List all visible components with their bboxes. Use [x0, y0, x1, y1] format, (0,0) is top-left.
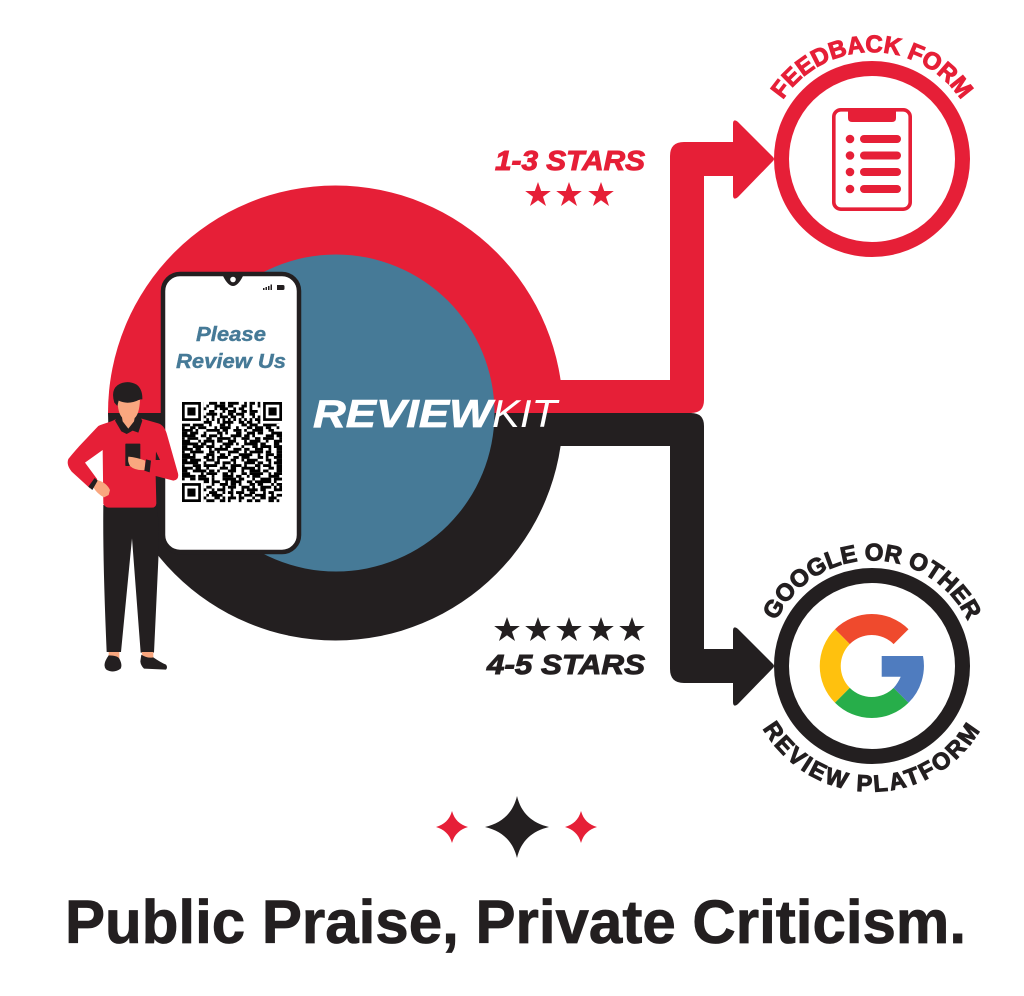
hair	[113, 382, 142, 406]
phone notch	[223, 276, 243, 286]
arrow: red to feedback form	[540, 120, 774, 413]
icon: google g	[820, 614, 924, 718]
phone text: please review us: Please	[196, 323, 266, 346]
review platform text: REVIEW PLATFORM	[762, 720, 980, 792]
google review platform badge	[762, 543, 980, 792]
blue inner circle	[178, 254, 494, 572]
right hand	[128, 457, 145, 470]
feedback form text: FEEDBACK FORM	[770, 34, 974, 100]
dark underarm	[156, 452, 160, 460]
QR code	[181, 401, 283, 503]
person holding phone	[68, 382, 178, 672]
arrow: black to review platform	[540, 413, 774, 706]
QR finder patterns	[181, 401, 283, 503]
curved path: feedback label	[772, 52, 972, 122]
phone text: please review us: Review Us	[176, 350, 286, 373]
phone body	[163, 274, 299, 552]
three red stars	[525, 182, 614, 206]
title: Public Praise, Private Criticism.	[65, 888, 966, 956]
five black stars	[494, 617, 645, 641]
sparkle centre	[485, 796, 549, 858]
sweater	[68, 419, 178, 508]
left cuff	[88, 478, 98, 490]
label: 4-5 stars: 4-5 STARS	[486, 649, 645, 680]
neck and face	[117, 400, 140, 429]
sparkle right	[565, 811, 597, 843]
handheld phone	[125, 444, 140, 466]
phone text: please review us	[176, 323, 286, 373]
red upper half of main circle	[108, 186, 563, 413]
feedback form badge	[770, 34, 974, 257]
google or other text: GOOGLE OR OTHER	[764, 543, 980, 622]
right cuff	[144, 459, 151, 472]
left hand	[93, 480, 110, 497]
curved path: top label	[768, 560, 976, 648]
logo: reviewkit	[313, 393, 560, 436]
logo: reviewkit: KIT	[492, 393, 560, 436]
phone with QR code	[163, 274, 299, 552]
shoes	[104, 655, 167, 672]
red ring	[782, 68, 962, 250]
status icons	[263, 284, 284, 290]
black lower half of main circle	[108, 413, 563, 641]
curved path: bottom label	[748, 688, 996, 792]
black ring	[782, 576, 962, 756]
label: 1-3 stars: 1-3 STARS	[495, 145, 645, 176]
sparkle left	[436, 811, 468, 843]
collar	[115, 417, 142, 434]
decorative sparkles	[436, 796, 597, 858]
icon: clipboard	[834, 110, 910, 209]
ankles	[109, 652, 153, 660]
trousers	[103, 505, 159, 653]
logo: reviewkit: REVIEW	[313, 393, 496, 436]
